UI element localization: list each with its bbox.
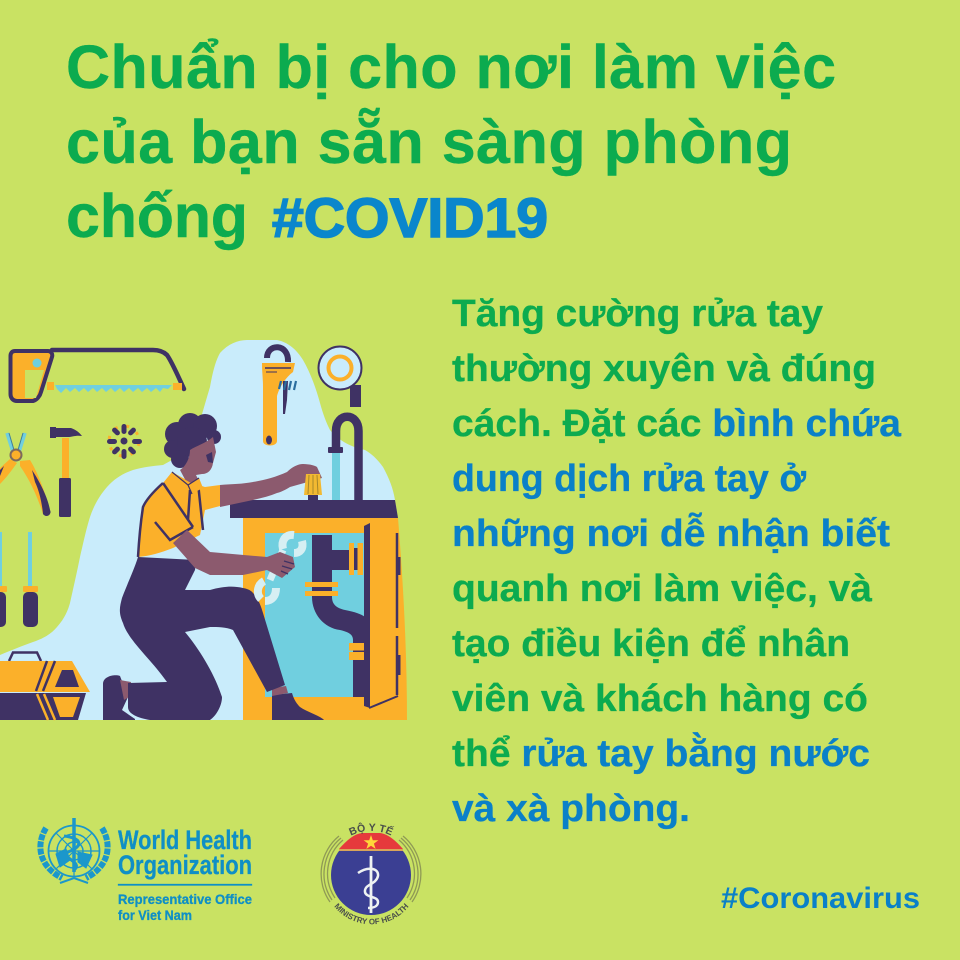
title: chống [66,182,248,250]
body text: Tăng cường rửa tay [452,293,823,335]
WHO emblem [40,818,108,883]
body text: cách. Đặt các bình chứa [452,403,902,445]
upper arm to brush [220,464,322,507]
pipes [312,535,365,697]
red band [339,833,403,849]
body text: thể rửa tay bằng nước [452,731,870,775]
laurel rings [321,836,421,902]
body text: tạo điều kiện để nhân [452,623,850,665]
boot right [272,693,324,720]
WHO wordmark: Representative Office [118,891,252,907]
hashtag: #Coronavirus [721,882,920,915]
WHO wordmark: Organization [118,850,252,880]
faucet and water [328,417,358,500]
body text: viên và khách hàng có [452,678,868,720]
lower arm [173,530,295,578]
body text: thường xuyên và đúng [452,348,876,390]
overalls [120,557,285,720]
wrench [258,535,303,601]
icon: hacksaw [10,350,184,401]
WHO wordmark: for Viet Nam [118,907,192,923]
icon: gear flower [107,424,142,459]
logo captions [347,831,395,838]
overall straps and shirt seams [138,483,203,557]
Ministry of Health logo: BỘ Y TẾ [348,822,394,836]
cabinet [243,518,407,720]
title: #COVID19 [272,186,548,249]
icon: pliers [0,433,51,516]
cabinet door [370,520,398,708]
light blue background blob [0,340,398,720]
star [364,835,378,849]
icon: hammer [50,427,82,517]
Ministry of Health logo [320,822,422,924]
boot left [103,675,135,720]
illustration: plumber fixing a sink [0,340,407,720]
title: Chuẩn bị cho nơi làm việc [66,33,836,101]
Ministry of Health logo: MINISTRY OF HEALTH [334,903,408,924]
body text: quanh nơi làm việc, và [452,568,873,610]
body text: và xà phòng. [452,788,690,830]
sink counter [230,500,398,518]
icon: magnifier ring [318,346,362,407]
body text: những nơi dễ nhận biết [452,511,890,555]
brush [304,474,322,495]
body text: dung dịch rửa tay ở [452,458,807,500]
plumber figure [103,413,324,720]
title [66,33,836,250]
title: của bạn sẵn sàng phòng [66,108,792,176]
icon: pipe wrench [262,347,296,446]
icon: screwdrivers [0,532,38,627]
neck and face [180,437,216,485]
caduceus [358,856,378,913]
WHO wordmark [118,825,252,923]
body text [452,293,902,830]
shirt [138,472,220,557]
hair [164,413,221,468]
WHO logo [40,818,252,923]
collar [166,472,203,495]
icon: toolbox [0,652,90,720]
WHO wordmark: World Health [118,825,252,855]
